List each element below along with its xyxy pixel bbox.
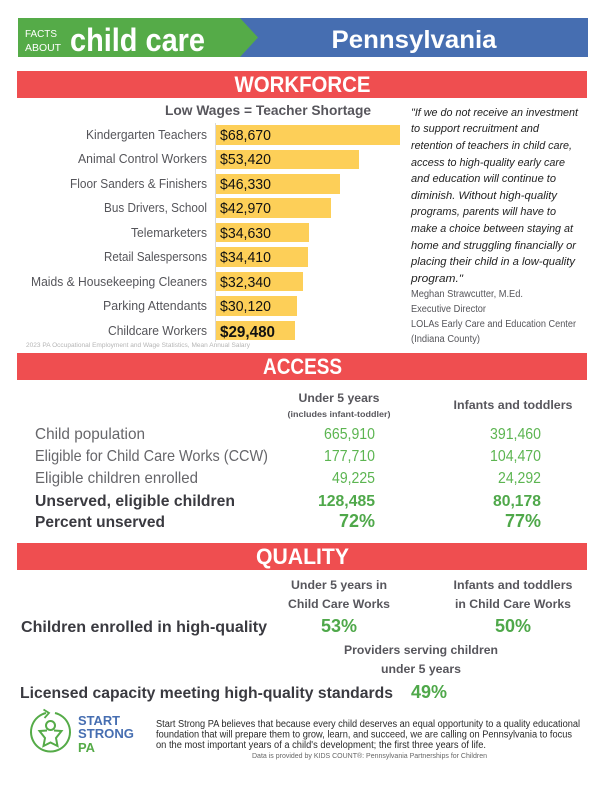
header banner (18, 18, 588, 58)
bar chart: wages: $29,480 (220, 324, 275, 341)
bar chart: wages: $53,420 (220, 152, 271, 168)
bar chart: wages: $34,630 (220, 226, 271, 242)
logo wordmark: PA (78, 740, 96, 755)
column header: providers: under 5 years (381, 662, 461, 676)
table: access data: 128,485 (318, 493, 375, 510)
bar chart: wages: Parking Attendants (103, 299, 207, 313)
table: access data: 49,225 (332, 470, 375, 487)
table: access data: Unserved, eligible children (35, 493, 235, 510)
column header: under 5 (288, 391, 391, 419)
column header: infants in CCW (454, 578, 573, 611)
table: access data: Eligible children enrolled (35, 470, 198, 487)
chart title: Low Wages = Teacher Shortage (165, 102, 371, 118)
table: access data: Child population (35, 426, 145, 443)
chart source note: 2023 PA Occupational Employment and Wage Statistics, Mean Annual Salary (26, 342, 251, 349)
quote: and education will continue to (411, 173, 556, 185)
panel: access (17, 353, 587, 531)
data source: Data is provided by KIDS COUNT®: Pennsylvania Partnerships for Children (252, 751, 487, 760)
icon: circular arrow with star child (31, 710, 70, 751)
mission statement: foundation that will prepare them to grow, learn, and succeed, we are calling on Pennsylvania to focus (156, 730, 572, 740)
table: access data: 177,710 (324, 448, 375, 465)
column header: providers: Providers serving children (344, 643, 498, 657)
title arrow: ABOUT (25, 42, 62, 54)
table: access data: Eligible for Child Care Works (CCW) (35, 448, 268, 465)
quote: programs, parents will have to (410, 206, 556, 218)
logo wordmark: STRONG (78, 726, 134, 741)
quote attribution (411, 289, 577, 345)
row: children enrolled in high-quality (21, 616, 531, 636)
quote: diminish. Without high-quality (411, 190, 558, 202)
column header: under 5 in CCW: Child Care Works (288, 597, 390, 611)
bar chart: wages: Retail Salespersons (104, 250, 207, 264)
quality heading (17, 543, 587, 570)
quote attribution: Executive Director (411, 304, 487, 315)
column header: under 5 in CCW: Under 5 years in (291, 578, 387, 592)
panel: workforce (17, 71, 587, 349)
table: access data (35, 426, 541, 531)
quote: "If we do not receive an investment (411, 107, 579, 119)
bar chart: wages: Bus Drivers, School (104, 201, 207, 215)
column header: under 5: (includes infant-toddler) (288, 409, 391, 419)
quote attribution: (Indiana County) (411, 334, 480, 345)
table: access data: 391,460 (490, 426, 541, 443)
bar chart: wages: $34,410 (220, 250, 271, 266)
state banner: Pennsylvania (332, 26, 498, 54)
row: children enrolled in high-quality: Children enrolled in high-quality (21, 619, 267, 636)
column header: infants in CCW: in Child Care Works (455, 597, 571, 611)
title arrow (18, 18, 258, 58)
quote: make a choice between staying at (411, 223, 574, 235)
bar chart: wages: $30,120 (220, 299, 271, 315)
table: access data: 72% (339, 511, 375, 531)
mission statement: on the most important years of a child's development; the first three years of life. (156, 740, 486, 751)
column header: infants and toddlers: Infants and toddlers (454, 398, 573, 412)
quote: home and struggling financially or (411, 240, 577, 252)
quote attribution: LOLAs Early Care and Education Center (411, 319, 577, 330)
mission statement (156, 719, 580, 751)
bar chart: wages: Childcare Workers (108, 324, 207, 338)
logo wordmark (78, 713, 134, 755)
quote (410, 107, 579, 345)
row: licensed capacity: Licensed capacity meeting high-quality standards (20, 685, 393, 702)
state banner (230, 18, 588, 57)
table: access data: 665,910 (324, 426, 375, 443)
quote: access to high-quality early care (411, 157, 565, 169)
table: access data: 80,178 (493, 493, 541, 510)
bar chart: wages: $42,970 (220, 201, 271, 217)
row: children enrolled in high-quality: 50% (495, 616, 531, 636)
logo: Start Strong PA (31, 710, 134, 755)
bar chart: wages: Kindergarten Teachers (86, 128, 207, 142)
table: access data: 24,292 (498, 470, 541, 487)
table: access data: 104,470 (490, 448, 541, 465)
column header: providers (344, 643, 498, 676)
column header: under 5 in CCW (288, 578, 390, 611)
bar chart: wages: Telemarketers (131, 226, 207, 240)
workforce heading (17, 71, 587, 98)
table: access data: 77% (505, 511, 541, 531)
title arrow: child care (70, 22, 205, 58)
quote attribution: Meghan Strawcutter, M.Ed. (411, 289, 523, 300)
bar chart: wages: $46,330 (220, 177, 271, 193)
column header: under 5: Under 5 years (298, 391, 380, 405)
bar chart: wages: Animal Control Workers (78, 152, 207, 166)
bar chart: wages (31, 123, 400, 342)
quote: to support recruitment and (411, 123, 540, 135)
quote: placing their child in a low-quality (410, 256, 576, 268)
bar chart: wages: Floor Sanders & Finishers (70, 177, 207, 191)
table: access data: Percent unserved (35, 514, 165, 531)
row: children enrolled in high-quality: 53% (321, 616, 357, 636)
quote: program." (410, 273, 464, 285)
bar chart: wages: $32,340 (220, 275, 271, 291)
quality heading: QUALITY (256, 544, 349, 569)
column header: infants in CCW: Infants and toddlers (454, 578, 573, 592)
title arrow: FACTS (25, 28, 57, 40)
quote: retention of teachers in child care, (411, 140, 572, 152)
mission statement: Start Strong PA believes that because every child deserves an equal opportunity to a quality educational (156, 719, 580, 730)
row: licensed capacity: 49% (411, 682, 447, 702)
logo wordmark: START (78, 713, 120, 728)
panel: quality (17, 543, 587, 702)
workforce heading: WORKFORCE (234, 72, 370, 97)
access heading (17, 353, 587, 380)
access heading: ACCESS (263, 354, 342, 379)
bar chart: wages: $68,670 (220, 128, 271, 144)
bar chart: wages: Maids & Housekeeping Cleaners (31, 275, 207, 289)
